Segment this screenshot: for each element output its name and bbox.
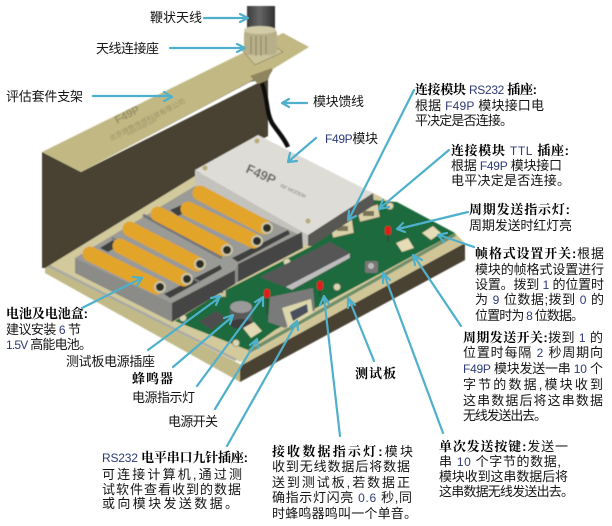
whip antenna	[242, 6, 283, 65]
arrow: TTL socket	[379, 150, 449, 209]
callout: frame format switch: 位置时为 8 位数据。	[475, 308, 584, 323]
arrow: bracket	[93, 92, 172, 101]
callout: battery and case: 建议安装 6 节	[6, 322, 81, 337]
label: module feeder: 模块馈线	[313, 94, 364, 109]
module label: RF MODEM	[279, 183, 307, 200]
label: power LED: 电源指示灯	[132, 390, 195, 405]
evaluation kit bracket	[42, 33, 309, 268]
callout: receive data LED: 送到测试板,若数据正	[272, 475, 410, 490]
callout: TTL socket: 电平决定是否连接。	[451, 173, 570, 188]
callout: receive data LED: 确指示灯闪亮 0.6 秒,同	[272, 490, 412, 505]
callout: RS232 nine pin socket: 可连接计算机,通过测	[102, 467, 242, 482]
F49P module	[195, 135, 374, 246]
label: antenna connector: 天线连接座	[96, 41, 159, 56]
callout: single send key	[439, 439, 574, 499]
callout: periodic send LED: 周期发送指示灯:	[469, 202, 570, 217]
callout: battery and case: 电池及电池盒:	[6, 306, 88, 321]
bracket engraved text: F49P	[113, 104, 142, 127]
callout: RS232 nine pin socket	[102, 450, 248, 511]
module label	[244, 161, 307, 200]
callout: TTL socket: 根据 F49P 模块接口	[451, 158, 562, 173]
callout: single send key: 模块收到这串数据后将	[439, 469, 568, 484]
callout: periodic send LED: 周期发送时红灯亮	[469, 218, 572, 233]
microcontroller chip	[260, 242, 350, 290]
lower connector nut	[250, 68, 272, 84]
arrow: buzzer	[173, 315, 233, 367]
label: test board power socket: 测试板电源插座	[66, 354, 155, 369]
LEDs	[264, 226, 391, 298]
arrow: RS232 nine pin	[227, 321, 298, 446]
arrow: battery	[82, 277, 142, 308]
callout: frame format switch: 为 9 位数据;拨到 0 的	[475, 292, 604, 307]
callout: receive data LED: 时蜂鸣器鸣叫一个单音。	[272, 506, 417, 521]
arrow: power socket	[148, 296, 220, 350]
bracket engraved text: 北京微数传感科技有限公司	[108, 97, 187, 143]
arrow: single send key	[383, 273, 443, 433]
SMD inductor	[199, 311, 227, 330]
callout: single send key: 串 10 个字节的数据,	[439, 454, 561, 469]
arrow: periodic send LED	[397, 212, 468, 232]
callout: RS232 nine pin socket: RS232 电平串口九针插座:	[102, 450, 248, 465]
callout: periodic send switch: 位置时每隔 2 秒周期向	[463, 345, 603, 360]
callout: RS232 nine pin socket: 试软件查看收到的数据	[102, 482, 241, 497]
arrow: power LED	[197, 297, 263, 386]
arrow: test board	[348, 298, 374, 361]
base plate	[45, 170, 465, 382]
callout: periodic send switch: F49P 模块发送一串 10 个	[463, 361, 603, 376]
callout: RS232 socket	[415, 82, 544, 128]
callout: periodic send switch: 这串数据后将这串数据	[463, 393, 603, 408]
arrow: antenna connector	[170, 44, 245, 52]
callout: TTL socket	[451, 143, 570, 188]
switches and key	[396, 226, 441, 252]
power switch	[243, 322, 262, 338]
test circuit board	[175, 200, 456, 353]
arrow: whip antenna	[204, 14, 248, 22]
arrow: frame format switch	[438, 233, 474, 247]
callout: battery and case	[6, 306, 92, 352]
callout: periodic send switch: 周期发送开关:拨到 1 的	[463, 330, 603, 345]
callout: receive data LED: 接收数据指示灯:模块	[272, 444, 413, 459]
callout: receive data LED	[272, 444, 417, 521]
label: test board: 测试板	[355, 366, 396, 381]
product illustration: evaluation kit	[42, 6, 465, 382]
battery box	[75, 186, 303, 322]
label: buzzer: 蜂鸣器	[132, 371, 173, 386]
callout: RS232 nine pin socket: 或向模块发送数据。	[102, 496, 238, 511]
power socket	[214, 284, 226, 297]
arrow: periodic send switch	[413, 255, 461, 326]
label: power switch: 电源开关	[168, 414, 218, 429]
mounting holes	[180, 202, 394, 346]
board connectors	[330, 204, 380, 238]
arrow: receive LED	[320, 296, 340, 436]
arrow: power switch	[215, 339, 258, 409]
callout: RS232 socket: 根据 F49P 模块接口电	[415, 98, 544, 113]
callout: frame format switch: 帧格式设置开关:根据	[475, 246, 604, 261]
label: F49P module: F49P模块	[325, 131, 378, 146]
label: whip antenna: 鞭状天线	[150, 10, 202, 25]
buzzer	[230, 301, 252, 329]
callout: frame format switch: 设置。拨到 1 的位置时	[475, 277, 604, 292]
callout: periodic send LED	[469, 202, 572, 233]
callout: frame format switch	[475, 246, 604, 323]
DB9 serial connector	[268, 288, 315, 328]
bracket engraved text: www.f49p.com	[126, 118, 158, 138]
callout: periodic send switch: 无线发送出去。	[463, 408, 547, 423]
callout: periodic send switch	[463, 330, 603, 423]
callout: TTL socket: 连接模块 TTL 插座:	[451, 143, 569, 158]
label: evaluation kit bracket: 评估套件支架	[6, 89, 83, 104]
callout: receive data LED: 收到无线数据后将数据	[272, 459, 410, 474]
module label: F49P	[244, 161, 279, 188]
callout: RS232 socket: 连接模块 RS232 插座:	[415, 82, 537, 97]
callout: single send key: 这串数据无线发送出去。	[439, 484, 574, 499]
batteries	[90, 193, 264, 287]
arrows	[82, 14, 474, 446]
callout: battery and case: 1.5V 高能电池。	[6, 337, 92, 352]
callout: frame format switch: 模块的帧格式设置进行	[475, 262, 604, 277]
callout: periodic send switch: 字节的数据,模块收到	[463, 377, 603, 392]
arrow: feeder	[282, 99, 307, 107]
callout: RS232 socket: 平决定是否连接。	[415, 113, 513, 128]
feeder cable	[262, 83, 288, 147]
arrow: RS232 socket	[348, 90, 414, 220]
arrow: F49P module	[288, 138, 316, 162]
callout: single send key: 单次发送按键:发送一	[439, 439, 568, 454]
